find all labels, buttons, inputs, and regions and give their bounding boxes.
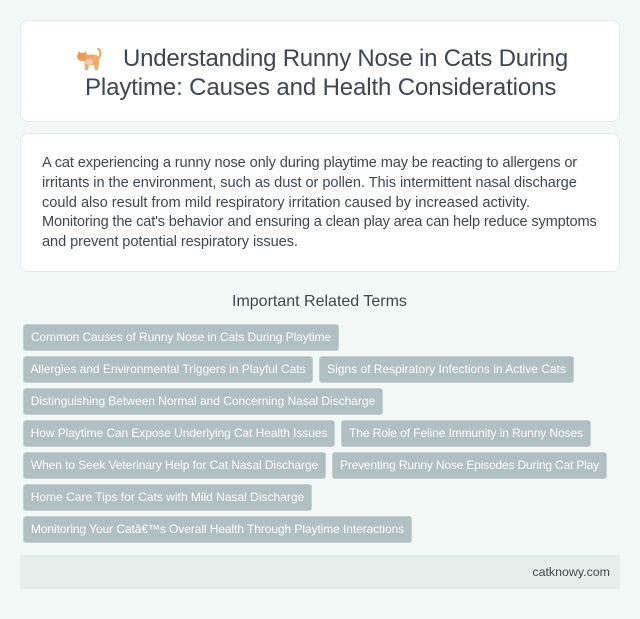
tag: Monitoring Your Catâ€™s Overall Health Through Playtime Interactions [31, 522, 404, 536]
tag [23, 420, 335, 447]
tag [332, 452, 607, 479]
tag: The Role of Feline Immunity in Runny Noses [349, 426, 583, 440]
panel: summary card [20, 133, 620, 272]
footer text: catknowy.com [532, 565, 610, 579]
tag [23, 452, 326, 479]
title text: Playtime: Causes and Health Considerations [85, 74, 556, 101]
tag: Common Causes of Runny Nose in Cats During Playtime [31, 330, 331, 344]
tag: Signs of Respiratory Infections in Active Cats [327, 362, 566, 376]
summary text: irritants in the environment, such as dust or pollen. This intermittent nasal discharge [42, 175, 577, 191]
summary text: could also result from mild respiratory irritation caused by increased activity. [42, 195, 530, 211]
tag: How Playtime Can Expose Underlying Cat Health Issues [31, 426, 327, 440]
tag: Preventing Runny Nose Episodes During Cat Play [340, 458, 599, 472]
tag: Distinguishing Between Normal and Concerning Nasal Discharge [31, 394, 375, 408]
footer bar [20, 555, 620, 589]
summary text: and prevent potential respiratory issues. [42, 234, 298, 250]
tag: Home Care Tips for Cats with Mild Nasal Discharge [31, 490, 304, 504]
panel: title card [20, 20, 620, 122]
summary text: A cat experiencing a runny nose only during playtime may be reacting to allergens or [42, 155, 577, 171]
tag [23, 516, 412, 543]
tag: When to Seek Veterinary Help for Cat Nasal Discharge [31, 458, 318, 472]
tag [23, 356, 313, 383]
tag [341, 420, 591, 447]
icon: cat [77, 48, 102, 70]
title text [85, 45, 568, 101]
tag [23, 388, 383, 415]
tag [23, 324, 339, 351]
tag: Allergies and Environmental Triggers in Playful Cats [30, 362, 306, 376]
tag list [23, 324, 607, 543]
tag [319, 356, 574, 383]
heading: related terms: Important Related Terms [232, 293, 407, 310]
summary text [42, 155, 597, 250]
tag [23, 484, 312, 511]
title text: Understanding Runny Nose in Cats During [123, 45, 568, 72]
summary text: Monitoring the cat's behavior and ensuring a clean play area can help reduce symptoms [42, 214, 597, 230]
